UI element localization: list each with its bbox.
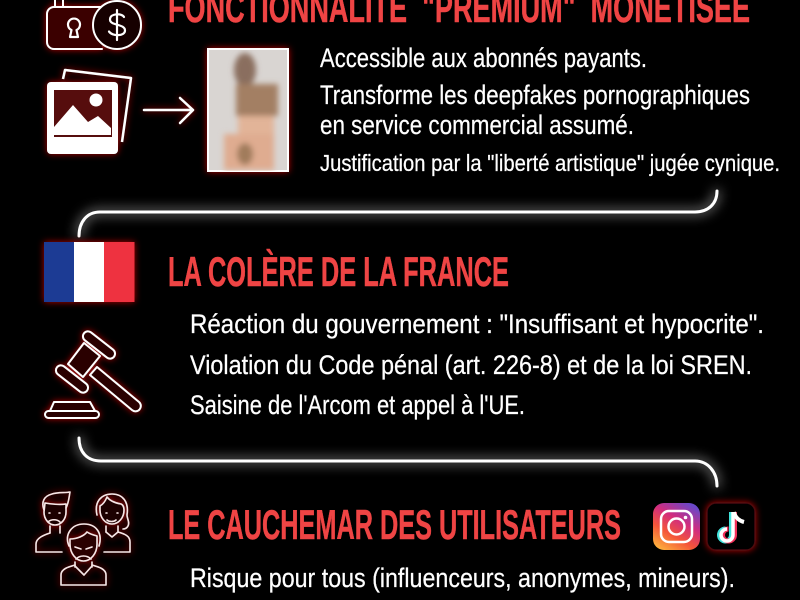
icon: TikTok: [707, 503, 755, 550]
heading: la colère de la France: LA COLÈRE DE LA FRANCE: [168, 248, 509, 295]
left man: [44, 503, 66, 525]
text block: premium: Accessible aux abonnés payants.: [320, 43, 647, 73]
icon: French flag: [44, 242, 134, 302]
text block: France: Saisine de l'Arcom et appel à l'UE.: [190, 390, 525, 420]
arrow: [144, 98, 193, 123]
icon: photos: [47, 70, 131, 154]
connector 1: [79, 191, 717, 236]
text block: users: Risque pour tous (influenceurs, anonymes, mineurs).: [190, 563, 735, 593]
icon: Instagram: [653, 503, 700, 550]
text block: premium: [320, 43, 780, 176]
text block: premium: en service commercial assumé.: [320, 110, 634, 140]
text block: France: [190, 309, 764, 420]
right woman: [100, 497, 124, 524]
centre man: [70, 532, 97, 561]
icon: gavel: [45, 329, 141, 418]
icon: padlock and dollar: [47, 0, 141, 49]
connector 2: [79, 438, 717, 486]
blurred photo: [207, 48, 289, 172]
icon: worried users: [36, 492, 130, 585]
